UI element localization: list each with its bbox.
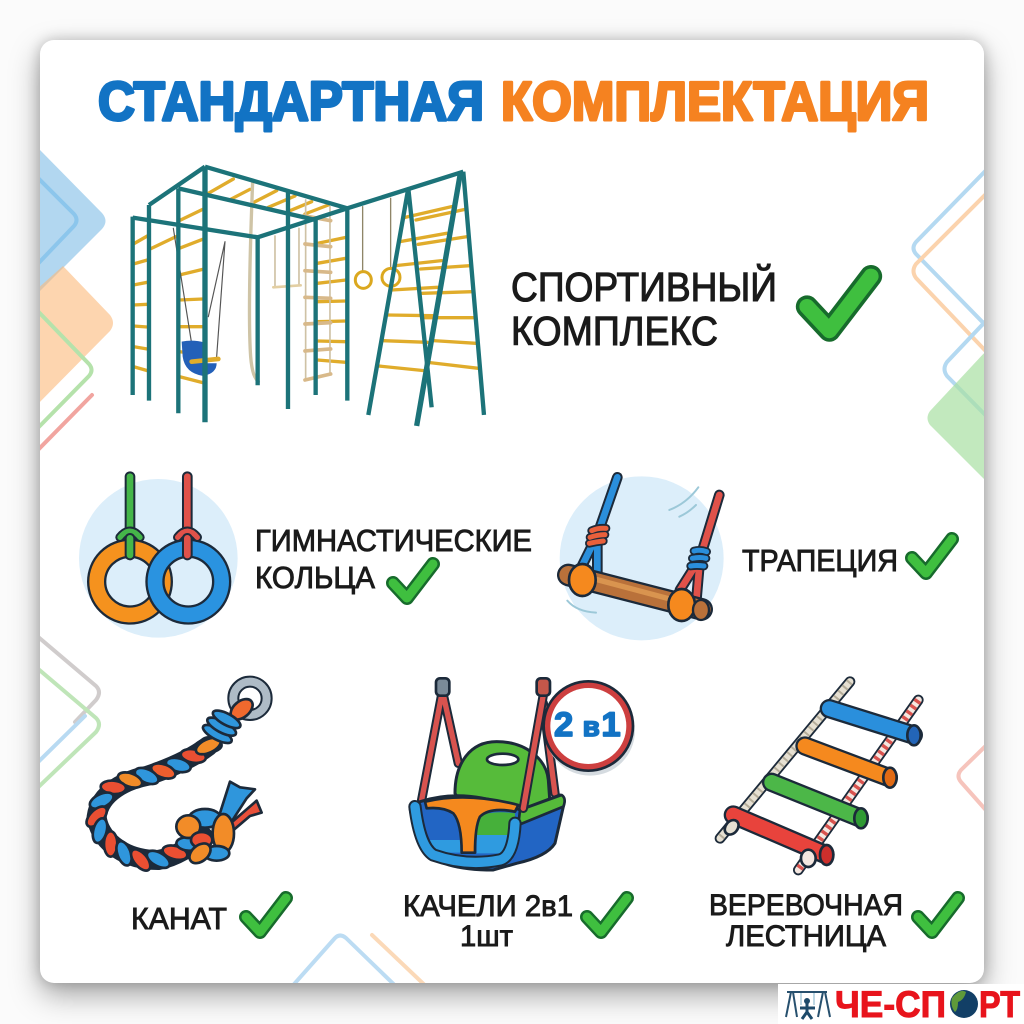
icon: rope: [83, 682, 267, 874]
sports complex illustration: [133, 167, 484, 426]
label: swing: [403, 890, 573, 953]
icon: 2-in-1 swing seat: 1: [601, 706, 621, 744]
label: swing: КАЧЕЛИ 2в1: [403, 890, 573, 923]
icon: 2-in-1 swing seat: в: [583, 711, 600, 742]
logo globe: [950, 990, 978, 1018]
icon: 2-in-1 swing seat: [410, 678, 635, 870]
label: gymnastic rings: [255, 523, 532, 595]
title: КОМПЛЕКТАЦИЯ: [501, 70, 929, 132]
title: [98, 70, 929, 132]
label: rope ladder: [709, 889, 903, 953]
label: sports complex: [511, 264, 777, 354]
label: rope: КАНАТ: [131, 901, 227, 936]
check: rings: [393, 564, 433, 598]
icon: 2-in-1 swing seat: 2: [554, 706, 573, 744]
label: gymnastic rings: КОЛЬЦА: [255, 560, 375, 595]
label: sports complex: СПОРТИВНЫЙ: [511, 264, 777, 310]
logo: Че-Спорт: ЧЕ-СП: [835, 984, 946, 1024]
icon: gymnastic rings: [79, 477, 238, 638]
logo: Че-Спорт: [778, 984, 1024, 1024]
label: trapeze: ТРАПЕЦИЯ: [742, 543, 898, 578]
logo icon: swing: [786, 992, 830, 1019]
label: rope ladder: ЛЕСТНИЦА: [726, 920, 886, 953]
label: sports complex: КОМПЛЕКС: [511, 308, 718, 354]
check: rope: [246, 898, 286, 932]
label: gymnastic rings: ГИМНАСТИЧЕСКИЕ: [255, 523, 532, 558]
label: swing: 1шт: [460, 920, 513, 953]
icon: trapeze: [560, 476, 724, 640]
check: rope ladder: [918, 898, 958, 932]
check: trapeze: [912, 539, 952, 573]
icon: rope ladder: [720, 682, 921, 870]
label: rope ladder: ВЕРЕВОЧНАЯ: [709, 889, 903, 922]
check: sports complex: [807, 276, 871, 331]
title: СТАНДАРТНАЯ: [98, 70, 484, 132]
check: swing: [587, 898, 627, 932]
